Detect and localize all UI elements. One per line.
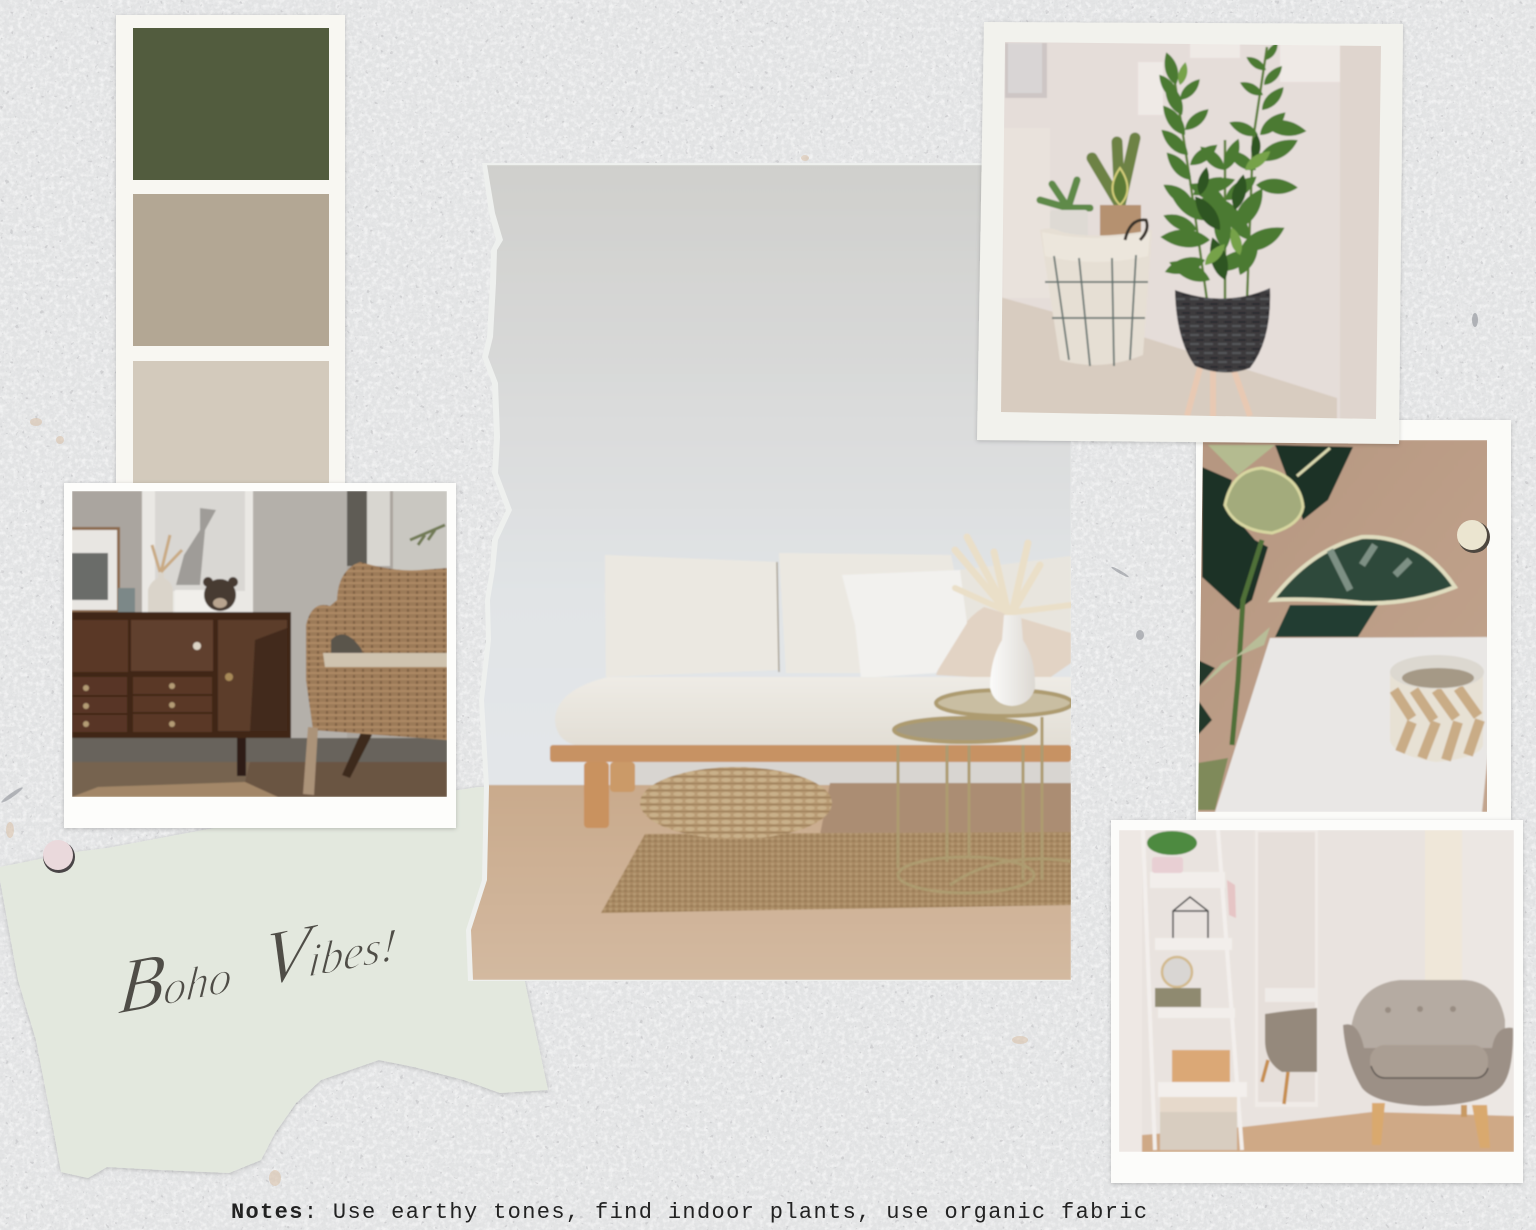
tall plant leaves <box>1173 47 1267 300</box>
sideboard <box>72 612 291 738</box>
vase with dried flowers <box>955 537 1071 613</box>
panel: rubber plant photo <box>1196 420 1511 820</box>
ceramic cup <box>1390 672 1483 762</box>
sofa pillows <box>962 558 1070 632</box>
rug <box>601 832 1071 913</box>
photo: potted plants <box>1000 40 1385 420</box>
panel: colour swatches <box>116 15 345 495</box>
pin: cream <box>1457 520 1490 553</box>
mirror <box>1255 830 1318 1107</box>
photo: armchair and shelf <box>1119 830 1514 1152</box>
pin: pink <box>43 840 75 873</box>
white shelf <box>1143 830 1242 1150</box>
panel: main sofa photo with torn edge <box>465 163 1075 981</box>
note heading: Boho Vibes: Boho Vibes! <box>115 890 401 1031</box>
panel: wicker chair photo <box>64 483 456 828</box>
swatch: taupe <box>133 194 329 346</box>
floor pouf <box>640 767 832 839</box>
wicker armchair <box>342 730 372 778</box>
photo: rubber plant and ceramic cup <box>1198 440 1500 812</box>
wire basket <box>1040 228 1152 365</box>
photo: sideboard and wicker chair <box>72 491 447 797</box>
swatch: light beige <box>133 361 329 486</box>
woven pot and stand <box>1187 368 1250 418</box>
notes caption: Notes: Use earthy tones, find indoor plants, use organic fabric <box>231 1200 1148 1225</box>
sofa seat <box>555 677 1071 745</box>
panel: armchair photo <box>1111 820 1523 1183</box>
photo: sofa living room <box>465 165 1075 980</box>
wall art and decor <box>72 527 120 612</box>
armchair <box>1372 1103 1490 1148</box>
panel: torn note paper <box>0 787 548 1178</box>
swatch: olive green <box>133 28 329 180</box>
gold side tables <box>894 690 1075 893</box>
small plants <box>1040 180 1090 216</box>
panel: potted plants photo <box>977 22 1403 444</box>
sofa frame and legs <box>550 745 1071 762</box>
